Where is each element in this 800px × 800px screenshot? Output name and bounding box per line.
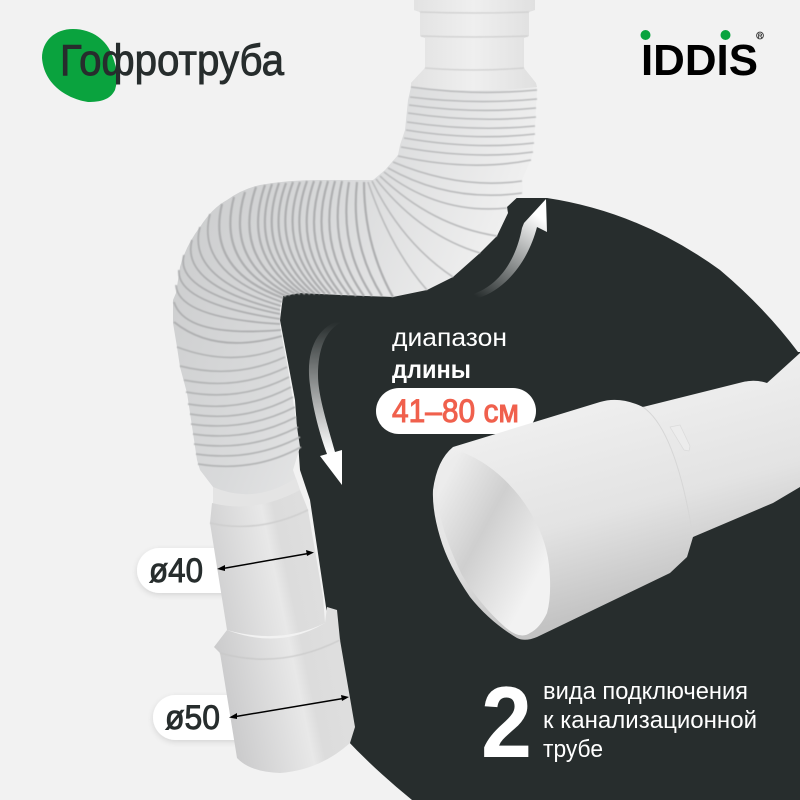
socket ring xyxy=(210,510,308,526)
ribs: lower vertical section xyxy=(177,347,301,466)
dark panel xyxy=(280,198,800,800)
text: connection types: к канализационной xyxy=(543,707,757,734)
socket opening xyxy=(437,452,550,635)
logo: IDDIS: R xyxy=(758,33,763,40)
dimension arrow: Ø40 xyxy=(217,550,314,571)
socket Ø40 xyxy=(210,490,325,636)
large socket close-up xyxy=(433,353,800,640)
ribs: lower bend xyxy=(174,214,282,343)
neck under the ribs xyxy=(213,478,308,510)
dimension arrow: Ø50 xyxy=(229,695,349,719)
top collar edges xyxy=(420,12,529,70)
top collar xyxy=(411,0,537,90)
arrow: downward xyxy=(309,320,342,485)
text: длины: длины xyxy=(392,356,471,384)
label pill: Ø50: ø50 xyxy=(165,699,220,737)
corrugated pipe xyxy=(173,0,537,510)
ribs: upper vertical section xyxy=(368,87,537,290)
title: Гофротруба xyxy=(60,36,284,85)
ribs: horizontal section xyxy=(219,181,393,298)
pipe body xyxy=(173,0,537,510)
text: connection types xyxy=(543,678,757,763)
top tab xyxy=(670,425,690,451)
socket Ø50 xyxy=(214,607,355,773)
label pill: Ø40: ø40 xyxy=(149,552,203,590)
text: connection types: трубе xyxy=(543,736,603,763)
label pill: Ø40 xyxy=(137,548,252,593)
text: диапазон: диапазон xyxy=(392,324,507,352)
pill: length range: 41–80 см xyxy=(392,393,519,429)
pill: length range xyxy=(376,388,536,434)
green blob xyxy=(42,29,117,102)
logo: IDDIS: IDDIS xyxy=(641,36,758,85)
socket body xyxy=(433,353,800,640)
socket Ø50 edge xyxy=(220,640,340,659)
big numeral 2: 2 xyxy=(481,667,532,779)
fitting: Ø40 and Ø50 sockets xyxy=(210,490,355,773)
text: connection types: вида подключения xyxy=(543,678,748,705)
label pill: Ø50 xyxy=(153,695,268,740)
collar shoulder edge xyxy=(643,407,693,537)
arrow: upward xyxy=(470,199,547,298)
